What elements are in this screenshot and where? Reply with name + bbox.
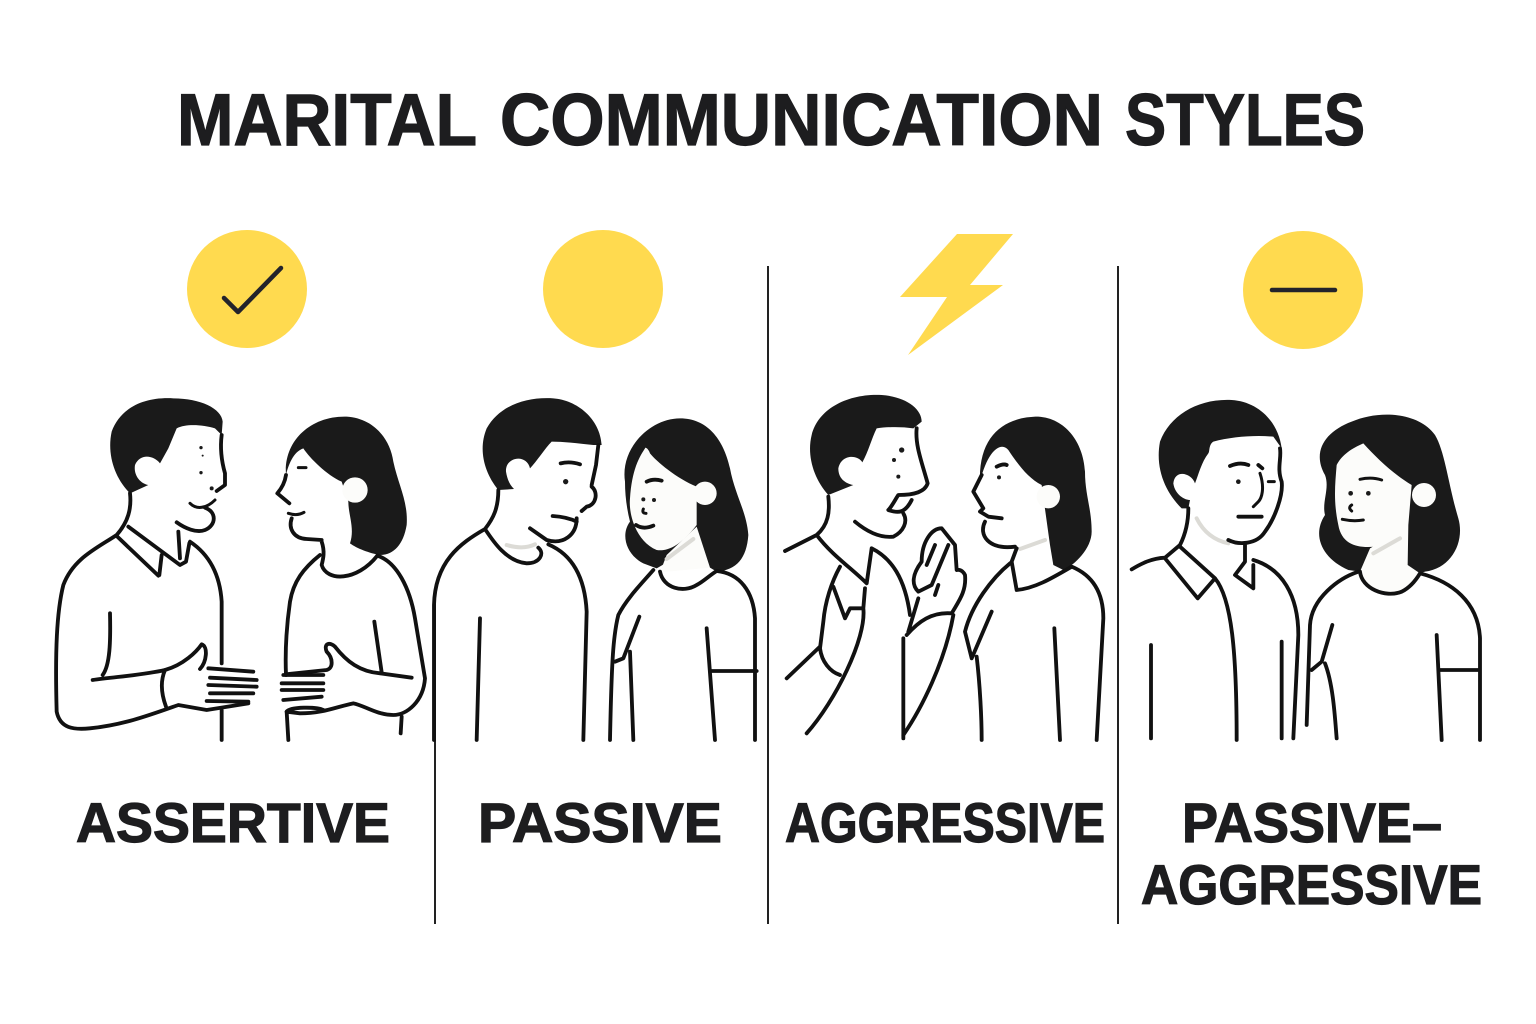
passive-aggressive woman xyxy=(1307,415,1480,740)
label: passive-aggressive: PASSIVE– xyxy=(1182,791,1442,854)
passive-aggressive man xyxy=(1132,400,1298,740)
icon: passive circle xyxy=(543,230,663,348)
aggressive man xyxy=(785,395,965,738)
panel: passive couple xyxy=(434,398,757,740)
label: passive: PASSIVE xyxy=(478,791,722,854)
passive woman xyxy=(610,418,757,740)
title: COMMUNICATION xyxy=(500,80,1103,161)
aggressive woman xyxy=(965,417,1103,740)
label: aggressive: AGGRESSIVE xyxy=(785,791,1105,854)
icon: assertive check xyxy=(187,230,307,348)
assertive woman xyxy=(277,417,425,740)
panel: aggressive couple xyxy=(785,395,1103,740)
label: passive-aggressive xyxy=(1141,791,1482,916)
title: MARITAL xyxy=(177,80,477,161)
divider lines xyxy=(435,266,1118,924)
assertive man xyxy=(56,398,257,740)
icon: lightning bolt xyxy=(900,234,1013,355)
panel: passive-aggressive couple xyxy=(1132,400,1480,740)
label: assertive: ASSERTIVE xyxy=(76,791,390,854)
passive man xyxy=(434,398,602,740)
panel: assertive couple xyxy=(56,398,425,740)
label: passive-aggressive: AGGRESSIVE xyxy=(1141,853,1482,916)
icon: minus circle xyxy=(1243,231,1363,349)
title: STYLES xyxy=(1125,80,1365,161)
title xyxy=(177,80,1365,161)
